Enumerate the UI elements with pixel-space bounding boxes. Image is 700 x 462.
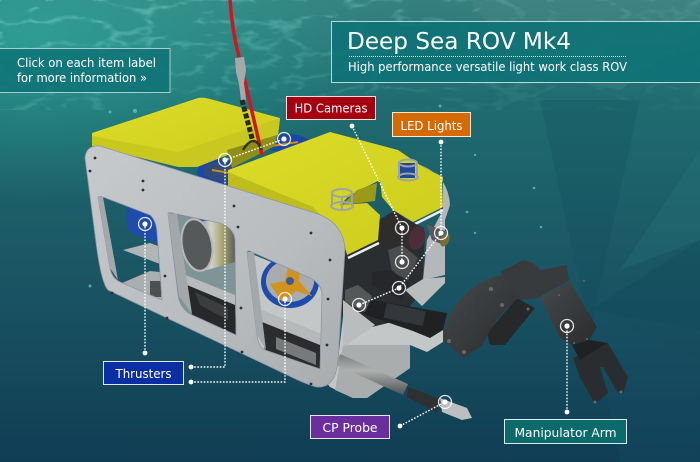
manipulator arm xyxy=(443,260,628,404)
label: CP Probe xyxy=(310,416,390,438)
front lights and cameras xyxy=(345,212,452,312)
leader lines xyxy=(145,126,567,426)
grey front frame plate xyxy=(85,146,345,387)
label: Manipulator Arm xyxy=(504,420,626,444)
manipulator base xyxy=(363,300,447,338)
camera cages on top xyxy=(331,160,418,210)
label: Manipulator Arm: Manipulator Arm xyxy=(514,426,616,440)
hotspot markers xyxy=(138,124,574,428)
CP probe xyxy=(336,354,472,420)
subtitle: High performance versatile light work class ROV xyxy=(348,60,628,74)
rivets xyxy=(89,157,331,385)
instruction panel xyxy=(0,48,170,92)
window 3 contents: propeller thruster xyxy=(255,256,320,369)
dark interior of vehicle xyxy=(335,210,425,330)
label: HD Cameras: HD Cameras xyxy=(294,102,368,116)
label: Thrusters: Thrusters xyxy=(115,367,172,381)
lower skid plate xyxy=(320,300,443,398)
window 2 contents: cylinder and battery xyxy=(178,214,236,335)
title panel xyxy=(332,22,700,82)
ROV vehicle xyxy=(85,98,472,420)
instruction panel: Click on each item label xyxy=(17,56,156,70)
title heading: Deep Sea ROV Mk4 xyxy=(347,29,571,55)
window 1 contents: thruster and shelf xyxy=(122,207,162,300)
label: LED Lights xyxy=(392,112,470,136)
blue rear thrusters xyxy=(197,134,310,185)
window backdrops xyxy=(168,213,236,335)
tether cable and chain xyxy=(230,0,262,155)
mid shelf xyxy=(405,277,445,306)
label: Thrusters xyxy=(104,362,184,384)
inner bevels xyxy=(98,197,266,350)
instruction panel: for more information » xyxy=(17,71,147,85)
label: CP Probe: CP Probe xyxy=(322,421,378,435)
yellow flotation pods xyxy=(92,98,443,258)
label: HD Cameras xyxy=(286,96,376,120)
rear right frame xyxy=(420,165,450,280)
label: LED Lights: LED Lights xyxy=(400,119,462,133)
